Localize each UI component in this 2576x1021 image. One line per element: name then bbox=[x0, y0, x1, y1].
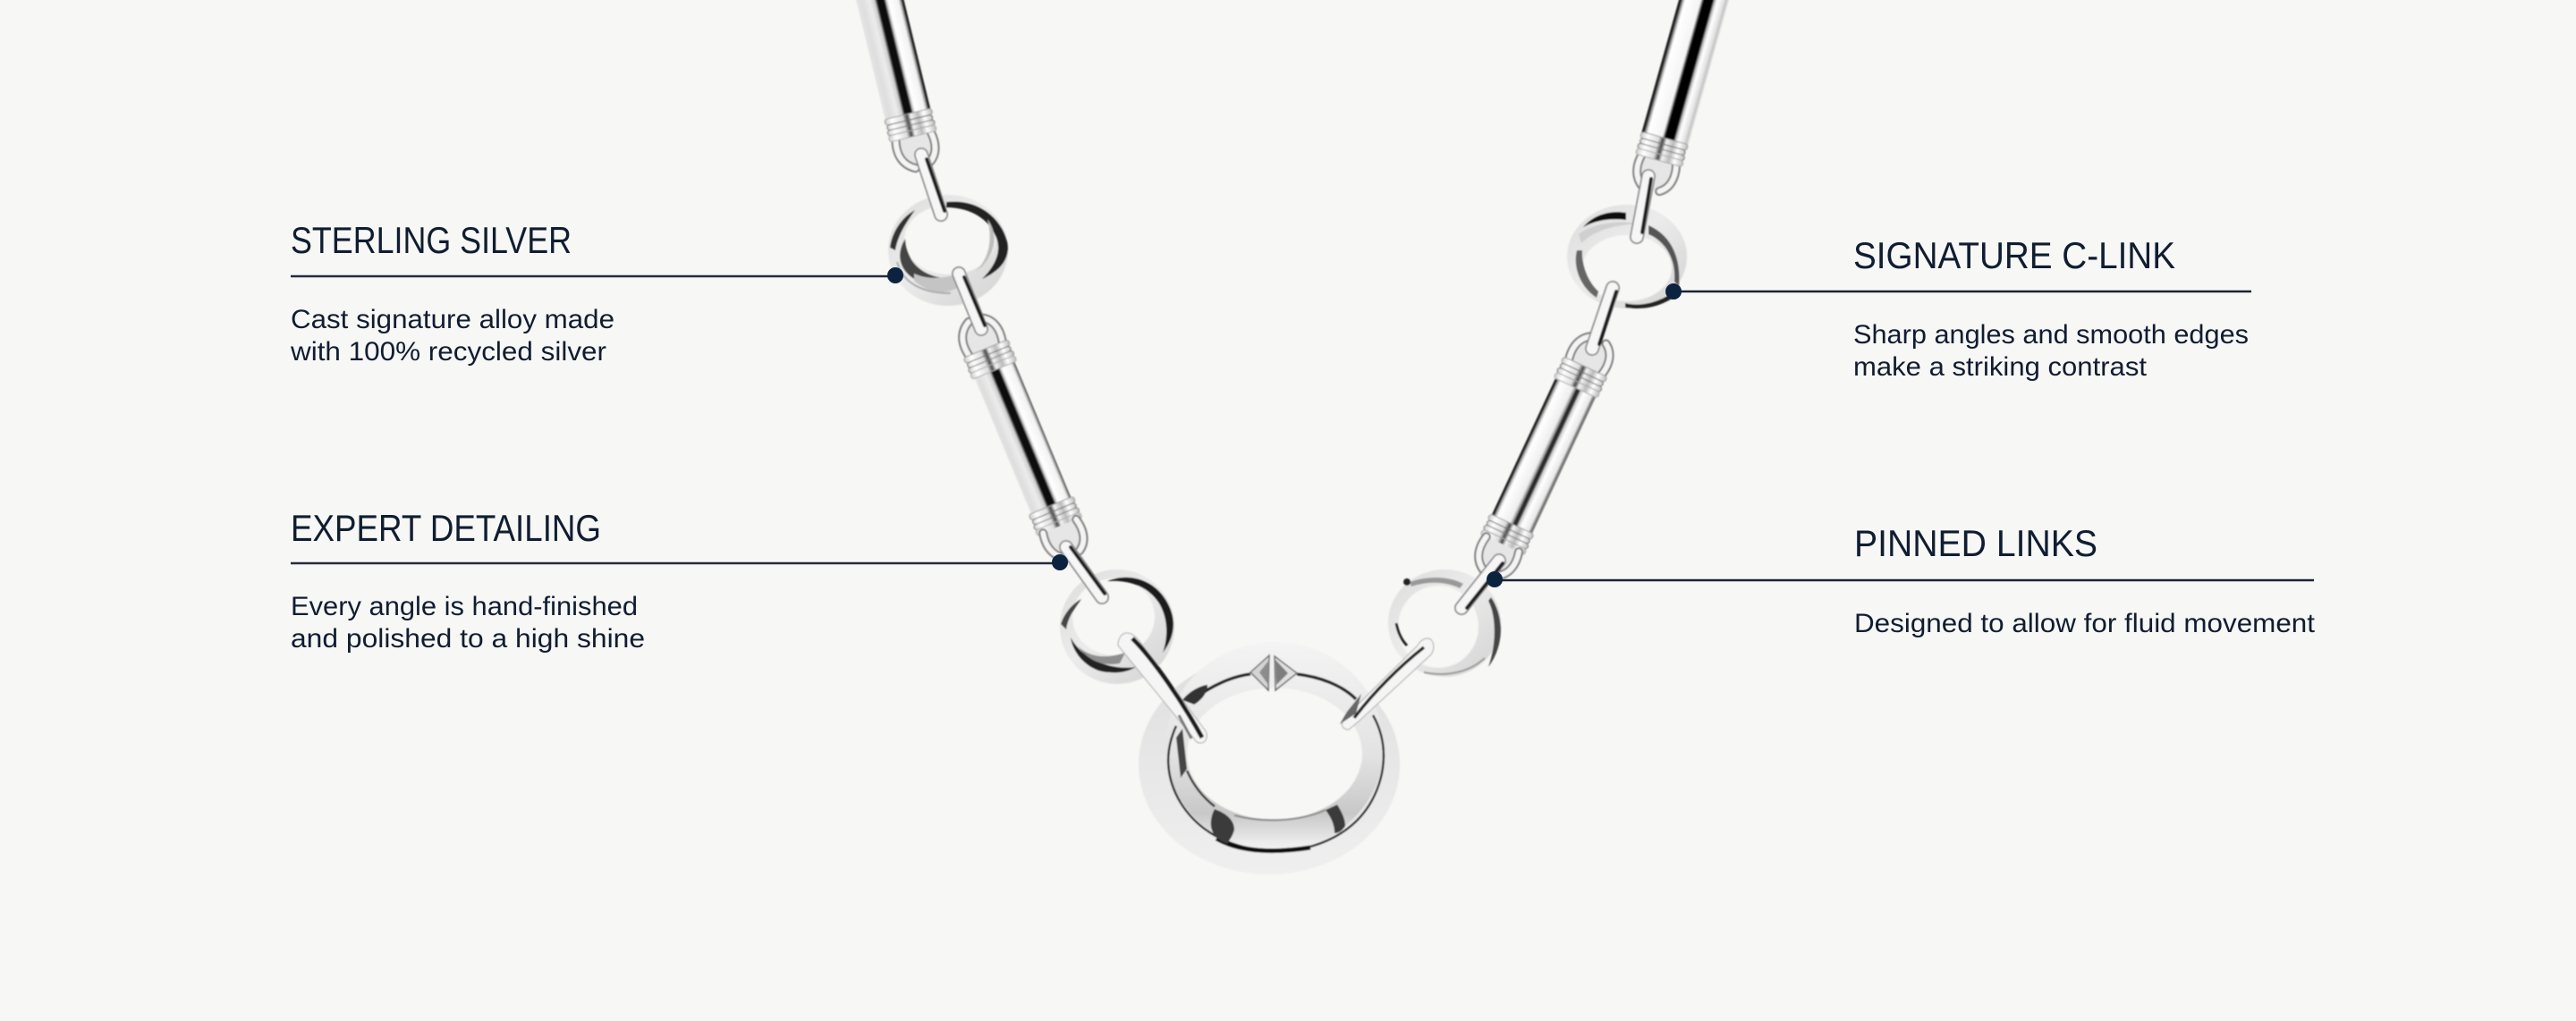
rods: connecting links bbox=[921, 155, 1651, 608]
leader line bbox=[291, 562, 1060, 564]
heading: STERLING SILVER bbox=[291, 219, 572, 261]
description: with 100% recycled silver bbox=[290, 337, 606, 367]
description: and polished to a high shine bbox=[291, 624, 645, 654]
callout: pinned links bbox=[1487, 522, 2316, 638]
dark reflection left bbox=[1211, 809, 1234, 844]
callout: signature c-link bbox=[1665, 234, 2251, 382]
marker dot bbox=[887, 267, 903, 283]
pin: left large link bbox=[1118, 633, 1207, 743]
ring: upper right c-link bbox=[1567, 205, 1687, 308]
leader line bbox=[291, 275, 895, 277]
bar link: middle right bbox=[1467, 328, 1621, 584]
callout: sterling silver bbox=[290, 219, 903, 367]
leader line bbox=[1674, 291, 2251, 292]
necklace illustration bbox=[844, 0, 1733, 874]
heading: SIGNATURE C-LINK bbox=[1853, 234, 2175, 276]
bar link: upper right bbox=[1627, 0, 1733, 198]
ring: upper left c-link bbox=[888, 195, 1008, 306]
pin: right large link bbox=[1340, 638, 1434, 730]
description: Sharp angles and smooth edges bbox=[1853, 320, 2249, 350]
dark reflection right bbox=[1326, 805, 1345, 833]
leader line bbox=[1495, 579, 2314, 581]
bar link: middle left bbox=[952, 310, 1094, 565]
pyramid stud left bbox=[1250, 655, 1269, 690]
pyramid stud right bbox=[1275, 656, 1297, 690]
marker dot bbox=[1487, 571, 1503, 587]
heading: EXPERT DETAILING bbox=[291, 507, 601, 549]
description: Every angle is hand-finished bbox=[291, 592, 638, 621]
description: Cast signature alloy made bbox=[291, 305, 614, 334]
heading: PINNED LINKS bbox=[1854, 522, 2097, 564]
callout: expert detailing bbox=[291, 507, 1068, 654]
bar link: upper left bbox=[844, 0, 945, 173]
description: Designed to allow for fluid movement bbox=[1854, 609, 2316, 638]
pendant: large oval ring bbox=[1139, 642, 1400, 874]
marker dot bbox=[1052, 554, 1068, 570]
ring: lower right c-link bbox=[1388, 570, 1501, 677]
marker dot bbox=[1665, 283, 1682, 300]
ring: lower left c-link bbox=[1060, 570, 1174, 684]
description: make a striking contrast bbox=[1853, 352, 2148, 382]
